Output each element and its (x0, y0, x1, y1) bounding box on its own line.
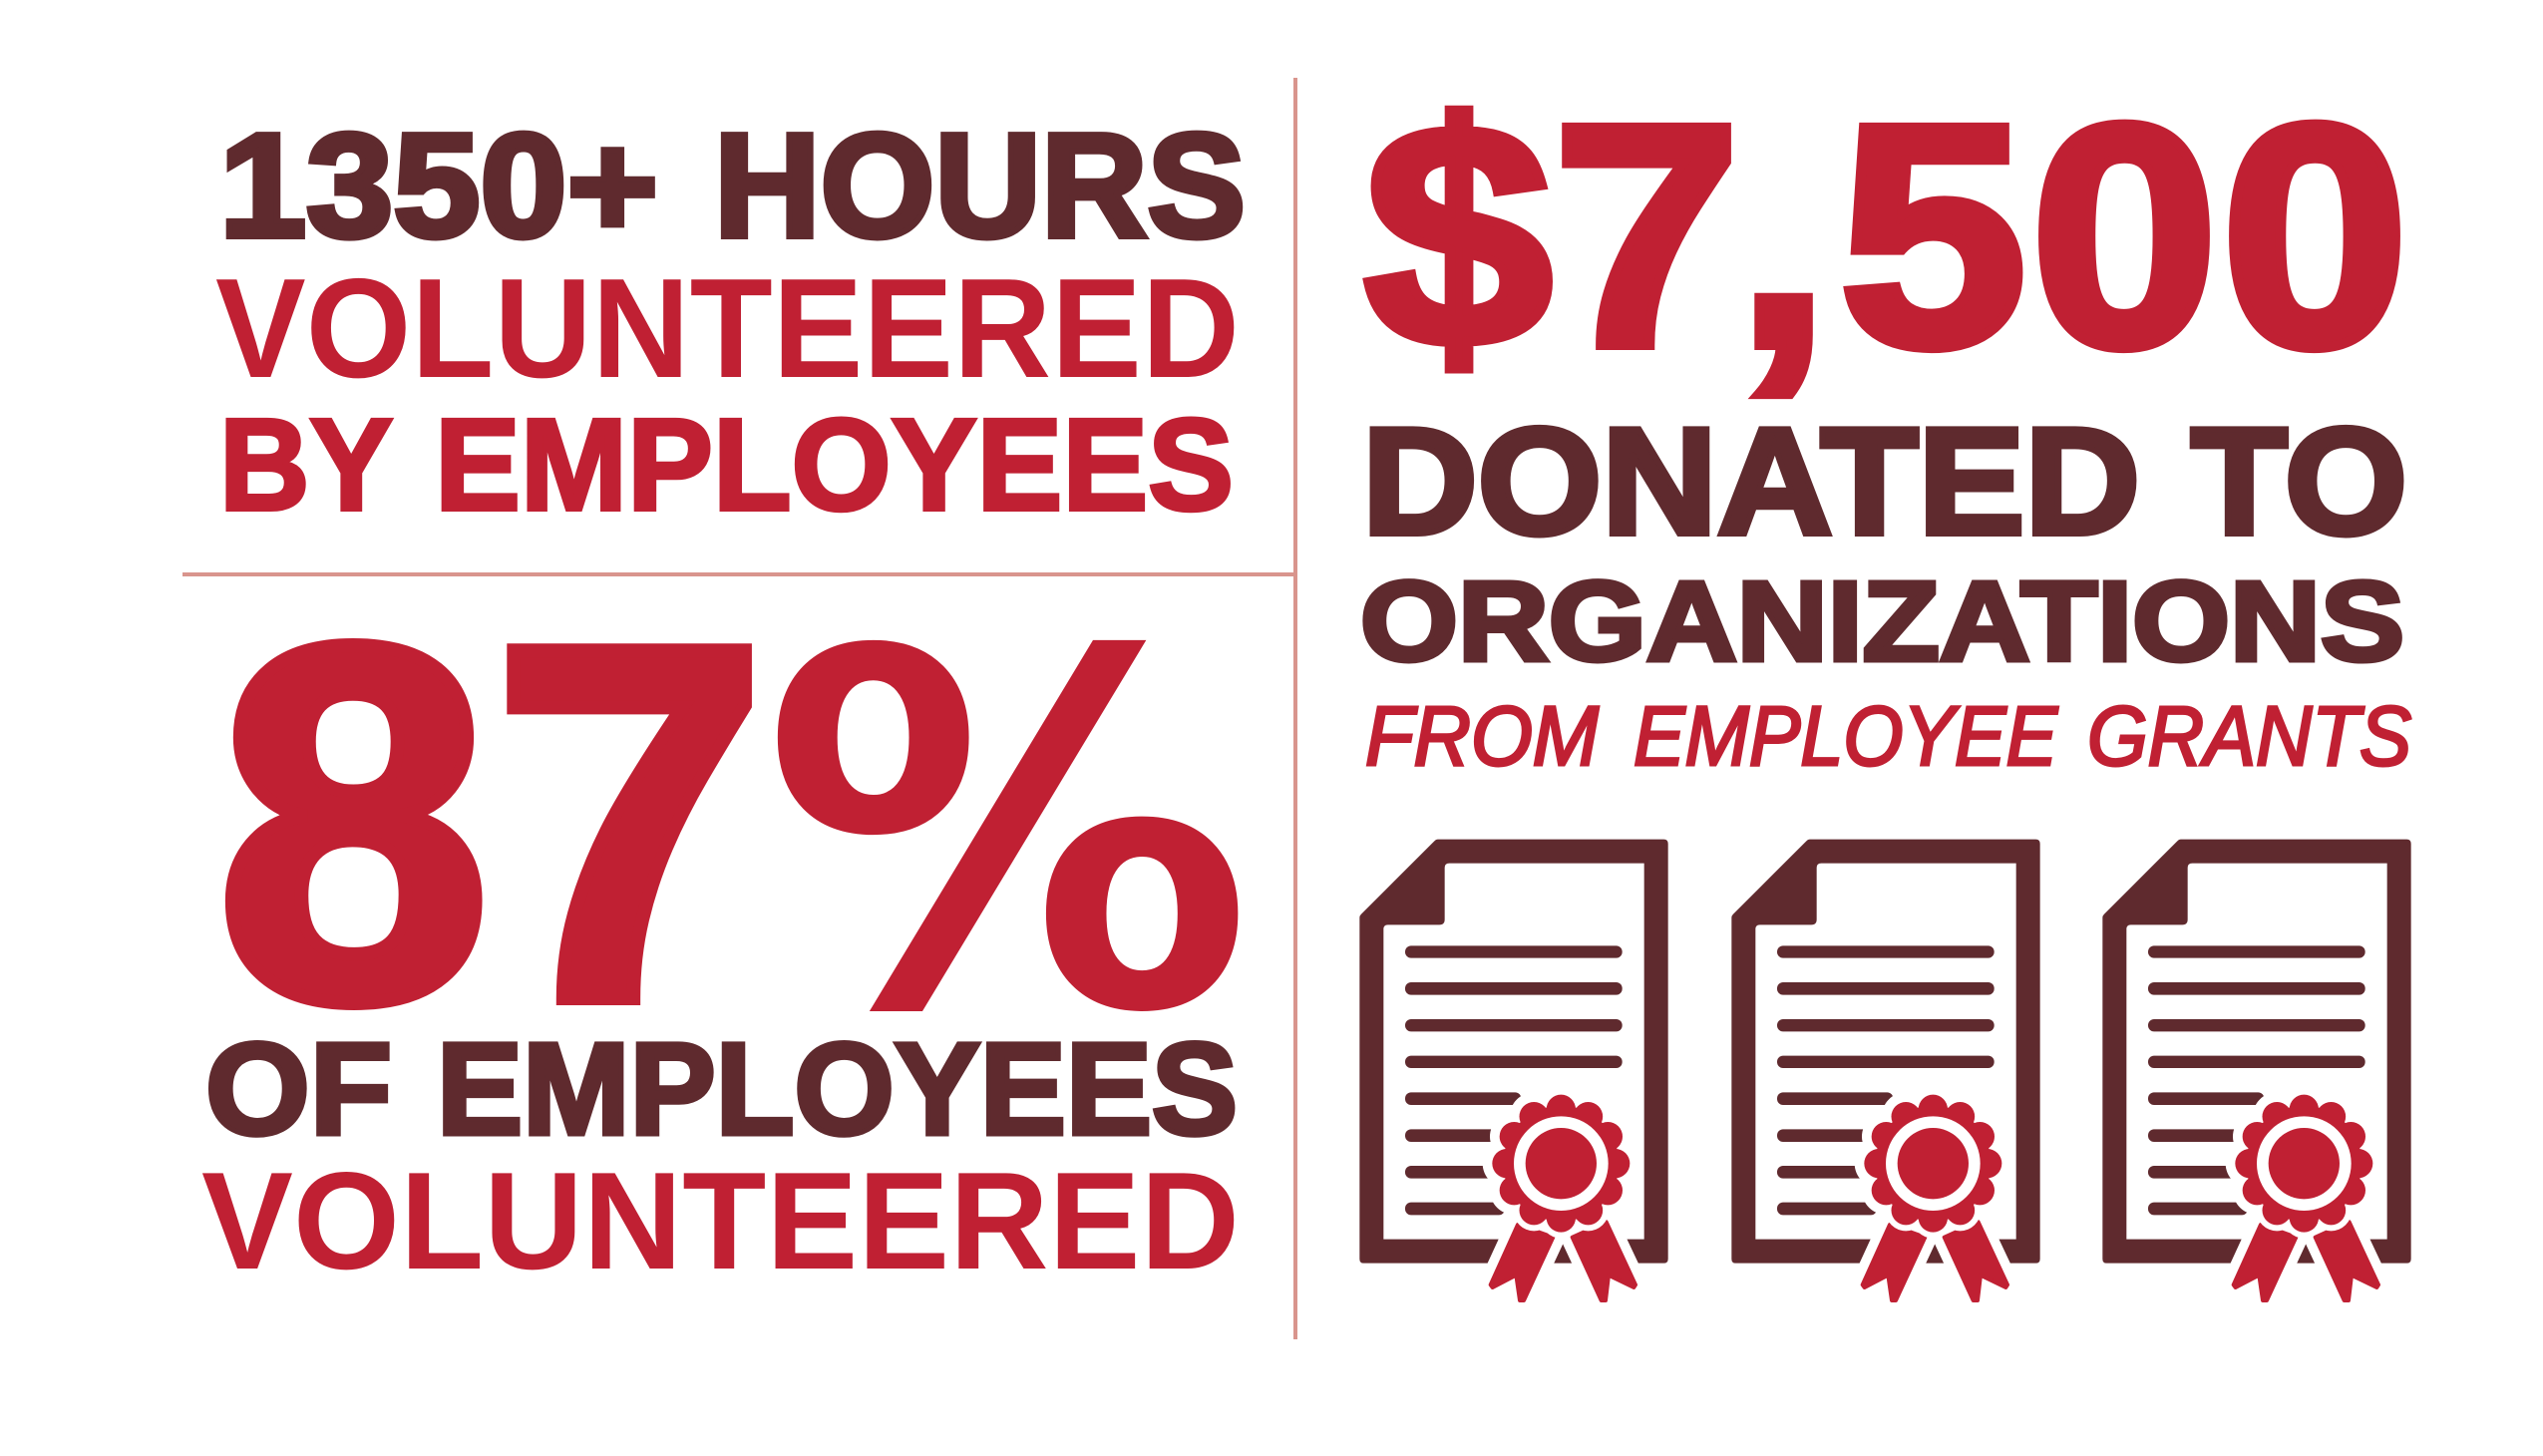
big number: 87%: % (762, 549, 1254, 1121)
text: from employee grants: EMPLOYEE (1634, 689, 2058, 783)
horizontal divider (182, 572, 1295, 576)
icon: certificate 2 (1731, 840, 2040, 1301)
text: volunteered: VOLUNTEERED (215, 249, 1240, 408)
text: organizations: ORGANIZATIONS (1360, 558, 2404, 684)
big number: 87%: 87 (216, 542, 767, 1106)
text: from employee grants (1365, 689, 2411, 783)
text: of employees: OF (205, 1015, 392, 1162)
text: by employees: EMPLOYEES (435, 391, 1234, 538)
panel: donations (1360, 59, 2411, 783)
big number: $7,500: $7,500 (1364, 59, 2409, 413)
icons: three certificates (1359, 840, 2411, 1301)
icon: certificate 1 (1359, 840, 1668, 1301)
heading: 1350+ hours: 1350+ (219, 104, 658, 268)
icon: certificate 3 (2102, 840, 2411, 1301)
text: donated to: TO (2191, 397, 2407, 566)
panel: percent of employees (201, 542, 1254, 1298)
text: volunteered: VOLUNTEERED (201, 1144, 1240, 1298)
big number: 87% (216, 542, 1254, 1121)
vertical divider (1293, 78, 1297, 1339)
text: from employee grants: GRANTS (2087, 689, 2411, 783)
panel: volunteer hours (215, 104, 1246, 538)
text: from employee grants: FROM (1365, 689, 1599, 783)
heading: 1350+ hours (219, 104, 1246, 268)
heading: 1350+ hours: HOURS (714, 104, 1246, 268)
text: donated to: DONATED (1362, 397, 2140, 566)
text: of employees: EMPLOYEES (437, 1015, 1238, 1162)
text: by employees: BY (219, 391, 393, 538)
